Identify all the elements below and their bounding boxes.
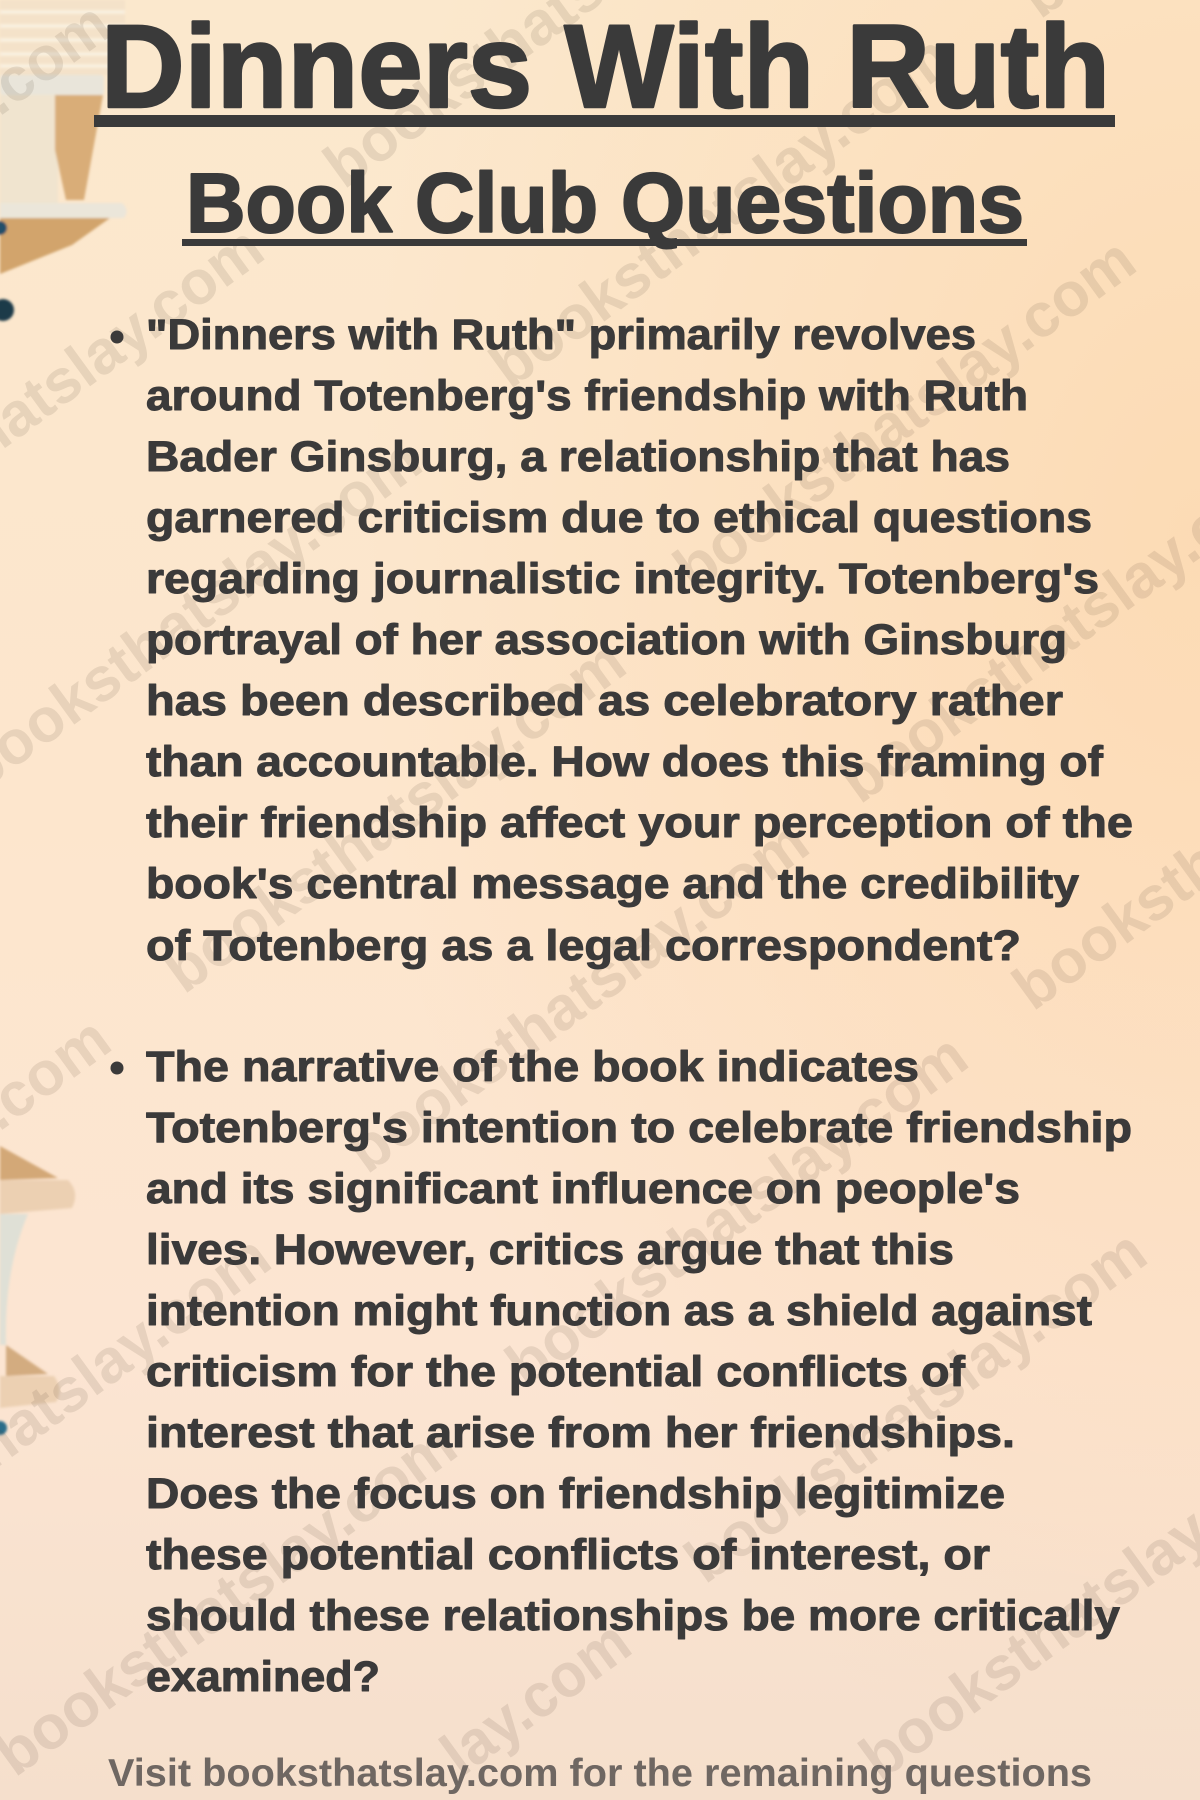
question 2 text: Does the focus on friendship legitimize	[146, 1470, 1005, 1518]
question 2 text: The narrative of the book indicates	[146, 1043, 919, 1091]
watermark: repeated site name: lay.com	[429, 1607, 643, 1789]
watermark: repeated site name: booksthatslay.com	[662, 225, 1148, 604]
question 1 text: book's central message and the credibility	[146, 860, 1079, 908]
question 1 text: than accountable. How does this framing of	[146, 738, 1104, 786]
question 1 text: has been described as celebratory rather	[146, 677, 1063, 725]
watermark: repeated site name: booksthatslay.com	[478, 22, 964, 401]
bullet 2	[110, 1062, 124, 1074]
watermark: repeated site name: booksthatslay.com	[494, 1021, 980, 1400]
question 1 text: of Totenberg as a legal correspondent?	[146, 922, 1021, 970]
question 2 text: these potential conflicts of interest, or	[146, 1531, 990, 1579]
question 2 text: should these relationships be more critically	[146, 1592, 1120, 1640]
question 1 text	[146, 311, 1133, 970]
question 1	[110, 311, 1133, 970]
question 1 text: "Dinners with Ruth" primarily revolves	[146, 311, 976, 359]
bullet 1	[110, 330, 124, 344]
question 1 text: garnered criticism due to ethical questions	[146, 494, 1092, 542]
question 2 text: intention might function as a shield against	[146, 1287, 1092, 1335]
watermark: repeated site name: booksthatslay.com	[673, 1217, 1159, 1596]
question 2 text: examined?	[146, 1653, 380, 1701]
question 2 text: criticism for the potential conflicts of	[146, 1348, 966, 1396]
question 1 text: portrayal of her association with Ginsburg	[146, 616, 1067, 664]
question 2 text: lives. However, critics argue that this	[146, 1226, 954, 1274]
subtitle: Book Club Questions	[186, 156, 1024, 250]
question 2 text: and its significant influence on people's	[146, 1165, 1020, 1213]
title: Dinners With Ruth	[101, 1, 1110, 133]
question 2 text: Totenberg's intention to celebrate friendship	[146, 1104, 1132, 1152]
question 1 text: around Totenberg's friendship with Ruth	[146, 372, 1028, 420]
illustration: stacked books at upper left	[0, 0, 127, 321]
question 2	[110, 1043, 1132, 1701]
question 1 text: Bader Ginsburg, a relationship that has	[146, 433, 1010, 481]
footer note: Visit booksthatslay.com for the remaining questions	[108, 1752, 1092, 1795]
question 2 text	[146, 1043, 1132, 1701]
watermark: repeated site name: booksthatslay.com	[335, 807, 821, 1186]
question 1 text: their friendship affect your perception of the	[146, 799, 1133, 847]
illustration: stacked books at lower left	[0, 1146, 75, 1435]
question 2 text: interest that arise from her friendships.	[146, 1409, 1015, 1457]
question 1 text: regarding journalistic integrity. Totenberg's	[146, 555, 1099, 603]
watermark: repeated site name: booksthatslay.com	[152, 627, 638, 1006]
